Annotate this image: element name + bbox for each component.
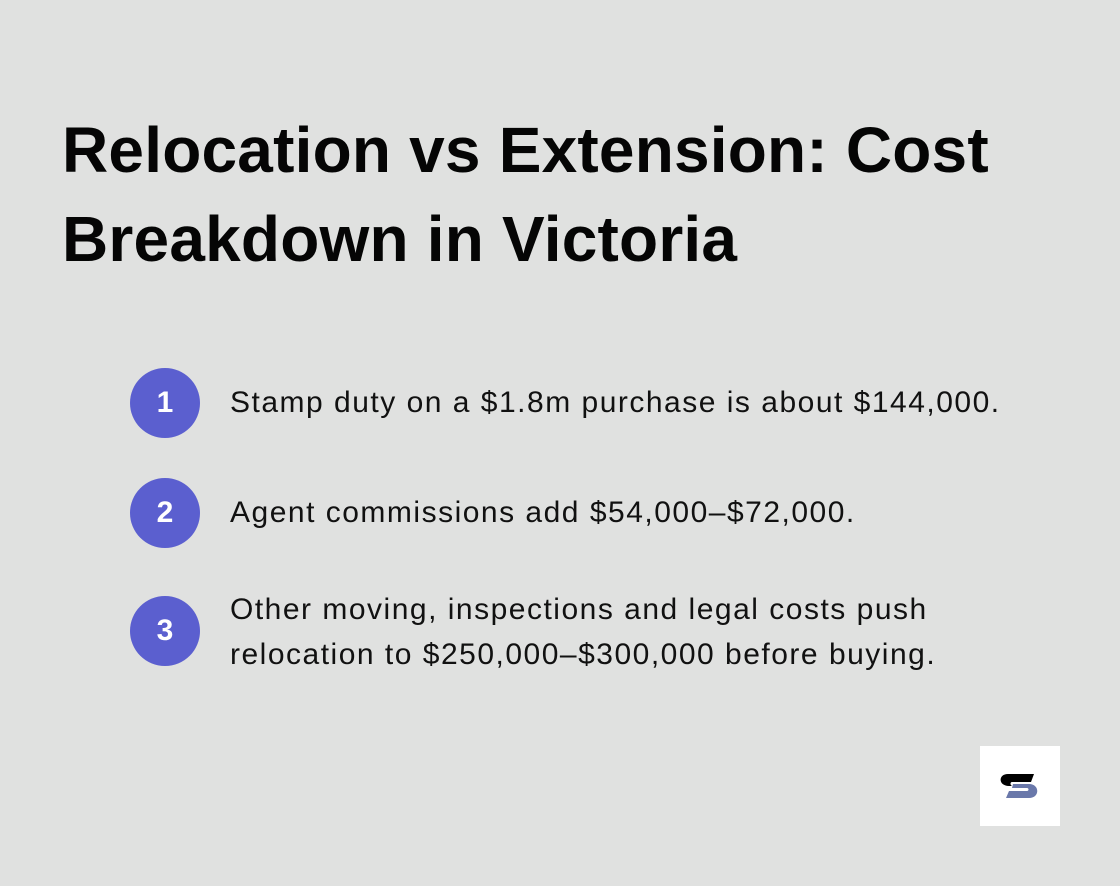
- item 3: Other moving, inspections and legal costs push: [230, 593, 928, 626]
- logo: [980, 746, 1060, 826]
- title: Relocation vs Extension: Cost: [62, 114, 989, 186]
- item 3: 3: [157, 614, 173, 647]
- item 2: 2: [157, 496, 173, 529]
- item 1: [130, 368, 1001, 438]
- item 1: 1: [157, 386, 173, 419]
- item 1: Stamp duty on a $1.8m purchase is about $144,000.: [230, 386, 1001, 419]
- item 3: [130, 593, 936, 671]
- item 2: [130, 478, 856, 548]
- item 3: relocation to $250,000–$300,000 before buying.: [230, 638, 936, 671]
- title: Breakdown in Victoria: [62, 203, 737, 275]
- title: [62, 114, 989, 275]
- item 2: Agent commissions add $54,000–$72,000.: [230, 496, 856, 529]
